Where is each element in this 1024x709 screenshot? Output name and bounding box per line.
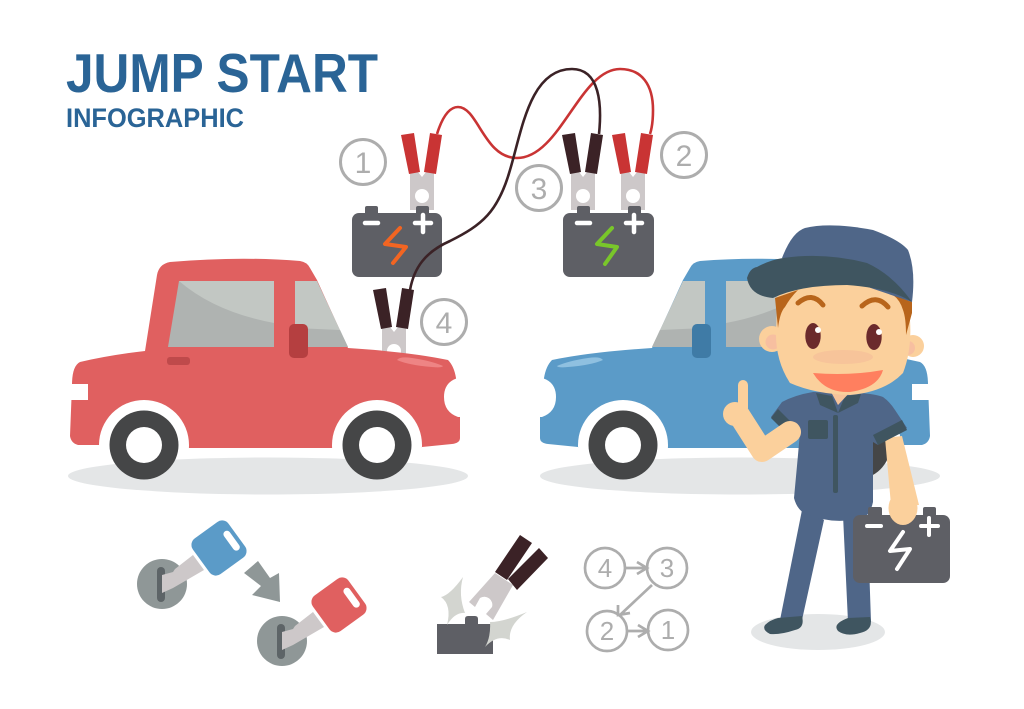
turn key arrow <box>244 561 280 602</box>
spark icon <box>437 535 548 654</box>
connection order diagram <box>585 548 688 651</box>
hair <box>775 290 912 335</box>
mouth <box>813 370 883 392</box>
subtitle: INFOGRAPHIC <box>66 103 244 133</box>
eyes <box>805 323 882 350</box>
step number 3 <box>516 166 562 210</box>
black cable <box>410 69 600 290</box>
clamp plate <box>469 573 513 620</box>
clamp 1 <box>401 133 442 210</box>
ground shadow: red car <box>68 458 468 494</box>
mechanic shadow <box>751 614 885 650</box>
legs <box>780 505 871 622</box>
red car hood highlight <box>397 357 443 367</box>
step number 1: 1 <box>355 147 371 180</box>
clamp 3 <box>562 133 603 210</box>
neck <box>830 390 852 405</box>
red car windows <box>168 281 348 347</box>
blue car lights <box>538 378 932 417</box>
step number 1 <box>340 140 386 184</box>
step number 3: 3 <box>531 173 547 206</box>
title: JUMP START <box>66 42 378 104</box>
right arm <box>885 436 919 505</box>
step number 2: 2 <box>676 140 692 173</box>
step number 2 <box>662 132 706 178</box>
red car lights <box>68 378 462 417</box>
blue car hood highlight <box>557 357 603 367</box>
sleeve cuffs <box>771 409 907 445</box>
torso <box>771 392 907 521</box>
carried battery <box>853 507 950 583</box>
ears <box>759 326 924 357</box>
blue car windows <box>652 281 832 347</box>
shoes <box>764 616 871 635</box>
cap <box>747 225 913 302</box>
connection order diagram: 3 <box>660 553 674 583</box>
sparks <box>441 577 527 647</box>
key off: blue <box>137 517 250 609</box>
step number 4 <box>422 300 466 344</box>
small battery <box>437 616 493 654</box>
face <box>776 285 910 395</box>
hand on battery <box>888 491 918 525</box>
battery 2 <box>563 206 654 277</box>
step number 4: 4 <box>436 307 452 340</box>
clamp 4 on red car <box>373 288 414 364</box>
clamp jaws <box>495 535 548 590</box>
key on: red <box>257 574 370 666</box>
nose shading <box>813 350 873 364</box>
battery 1 <box>352 206 442 277</box>
shirt details <box>808 393 861 493</box>
red car wheels <box>99 400 422 480</box>
clamp 2 <box>612 133 653 210</box>
raised arm and thumb <box>723 385 790 451</box>
connection order diagram: 1 <box>661 615 675 645</box>
blue car <box>538 259 932 490</box>
red car door handles <box>167 324 308 365</box>
connection order diagram: 4 <box>598 553 612 583</box>
red car <box>68 259 462 490</box>
red cable <box>437 69 653 158</box>
blue car door handle <box>692 324 711 358</box>
connection order diagram: 2 <box>600 616 614 646</box>
blue car wheels <box>578 400 900 480</box>
ground shadow: blue car <box>540 458 940 494</box>
mechanic <box>723 225 950 635</box>
eyebrows <box>798 297 888 307</box>
